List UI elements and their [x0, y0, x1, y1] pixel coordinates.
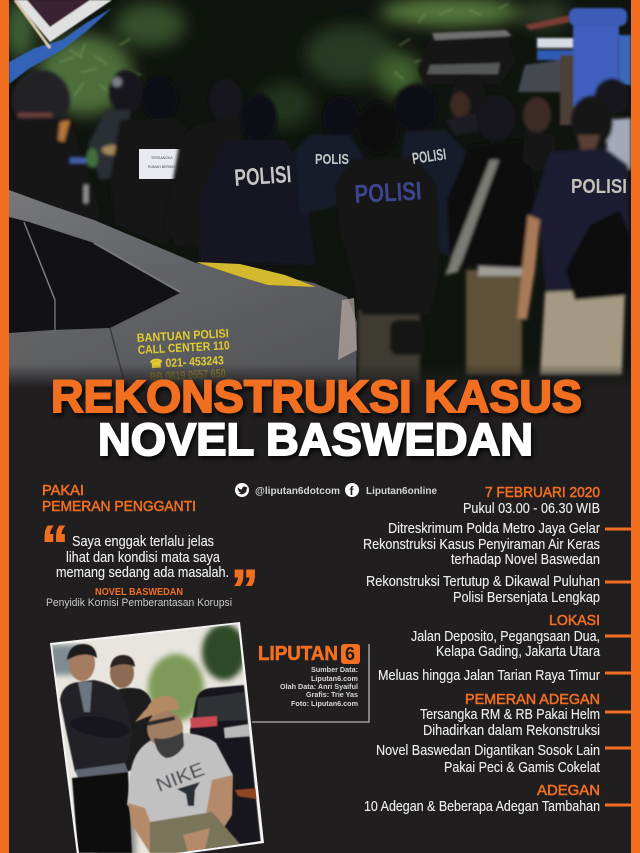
- blue post: [569, 8, 627, 107]
- door lettering: [137, 329, 230, 381]
- leaf details: [55, 4, 508, 95]
- icon: opening quote: “: [41, 514, 68, 576]
- quote text: [56, 534, 229, 581]
- text block: reconstruction: Ditreskrimum Polda Metro Jaya Gelar: [388, 521, 600, 537]
- door lettering: BB 0819 0557 650: [149, 366, 226, 384]
- facebook handle: Liputan6online: [366, 485, 437, 497]
- text block: closed reconstruction: Rekonstruksi Tertutup & Dikawal Puluhan: [366, 574, 600, 590]
- text block: reconstruction: Rekonstruksi Kasus Penyiraman Air Keras: [363, 537, 600, 553]
- polaroid photo: Novel Baswedan: [40, 620, 270, 853]
- orange frame left: [0, 0, 9, 853]
- icon: facebook: f: [350, 484, 354, 498]
- people silhouettes left: helmeted officers: [9, 70, 190, 245]
- shirt lettering: NIKE: [153, 759, 207, 797]
- hood POLISI lettering: [196, 262, 316, 287]
- section: date and time: 7 FEBRUARI 2020: [485, 484, 600, 501]
- timeline ticks: [605, 528, 631, 806]
- section: pemeran adegan: Tersangka RM & RB Pakai Helm: [420, 707, 600, 723]
- placard: TERSANGKA: [151, 156, 173, 160]
- section: adegan: [364, 782, 600, 815]
- section: pemeran adegan: PEMERAN ADEGAN: [465, 691, 600, 708]
- quote block: [41, 514, 258, 620]
- POLISI jacket lettering: POLIS: [315, 151, 349, 168]
- hero photo: police reconstruction scene: [5, 0, 631, 388]
- icon: closing quote: ”: [231, 558, 258, 620]
- foliage background: [5, 0, 570, 127]
- POLISI jacket lettering: POLISI: [234, 161, 292, 192]
- orange frame right: [631, 0, 640, 853]
- text block: closed reconstruction: Polisi Bersenjata Lengkap: [453, 590, 600, 606]
- section: lokasi: Meluas hingga Jalan Tarian Raya Timur: [378, 668, 600, 684]
- data credits: Liputan6.com: [311, 674, 358, 683]
- quote text: Saya enggak terlalu jelas: [72, 534, 214, 550]
- icon: twitter: [235, 483, 249, 497]
- suv: [190, 685, 262, 853]
- section: pemeran adegan: Novel Baswedan Digantikan Sosok Lain: [376, 743, 600, 759]
- two men standing: [60, 644, 155, 853]
- section: adegan: 10 Adegan & Beberapa Adegan Tambahan: [364, 799, 600, 815]
- quote attribution: Penyidik Komisi Pemberantasan Korupsi: [46, 597, 232, 609]
- credit box border: [252, 644, 369, 722]
- POLISI jacket lettering: POLISI: [571, 176, 627, 198]
- text block: reconstruction: terhadap Novel Baswedan: [451, 552, 600, 568]
- seated man in cap: [127, 696, 248, 853]
- logo: liputan6: LIPUTAN: [258, 643, 338, 665]
- section: lokasi: LOKASI: [549, 612, 600, 629]
- title line 1: REKONSTRUKSI KASUS: [51, 371, 582, 422]
- door lettering: ☎ 021- 453243: [149, 353, 224, 371]
- section heading: pakai pemeran pengganti: [42, 482, 196, 515]
- logo: liputan6: 6: [345, 644, 355, 664]
- quote text: memang sedang ada masalah.: [56, 565, 229, 581]
- door lettering: BANTUAN POLISI: [136, 326, 229, 345]
- section: date and time: Pukul 03.00 - 06.30 WIB: [463, 501, 600, 517]
- text block: reconstruction: [363, 521, 600, 568]
- section: adegan: ADEGAN: [537, 782, 600, 799]
- police car: [9, 190, 357, 388]
- twitter handle: @liputan6dotcom: [255, 485, 340, 497]
- door lettering: CALL CENTER 110: [137, 338, 230, 357]
- text block: closed reconstruction: [366, 574, 600, 606]
- sign and pole at top left: [9, 0, 112, 84]
- section: date and time: [463, 484, 600, 517]
- vehicles and buildings top right: [418, 15, 631, 125]
- POLISI jacket lettering: [235, 148, 626, 203]
- title line 2: NOVEL BASWEDAN: [98, 414, 533, 465]
- section heading: pakai pemeran pengganti: PAKAI: [42, 482, 84, 499]
- data credits: Olah Data: Anri Syaiful: [280, 682, 358, 691]
- placard: RUMAH BERSIH: [148, 165, 175, 169]
- icon: facebook: [345, 483, 359, 498]
- section: pemeran adegan: [376, 691, 600, 776]
- section: lokasi: Kelapa Gading, Jakarta Utara: [436, 644, 601, 660]
- data credits: Grafis: Trie Yas: [306, 690, 358, 699]
- data credits: [280, 665, 358, 708]
- POLISI jacket lettering: POLISI: [354, 176, 422, 209]
- quote text: lihat dan kondisi mata saya: [66, 550, 221, 566]
- section: lokasi: [378, 612, 601, 684]
- data credits: Sumber Data:: [311, 665, 358, 674]
- POLISI jacket lettering: POLISI: [411, 146, 447, 168]
- placard: [139, 149, 182, 179]
- section: lokasi: Jalan Deposito, Pegangsaan Dua,: [411, 629, 600, 645]
- quote attribution: NOVEL BASWEDAN: [95, 586, 183, 598]
- quote attribution: [46, 586, 232, 609]
- bottom fade: [9, 364, 631, 388]
- section: pemeran adegan: Pakai Peci & Gamis Cokelat: [444, 760, 600, 776]
- section: pemeran adegan: Dihadirkan dalam Rekonstruksi: [423, 723, 600, 739]
- section heading: pakai pemeran pengganti: PEMERAN PENGGANTI: [42, 498, 196, 515]
- data credits: Foto: Liputan6.com: [291, 699, 358, 708]
- officers backs: [165, 77, 631, 385]
